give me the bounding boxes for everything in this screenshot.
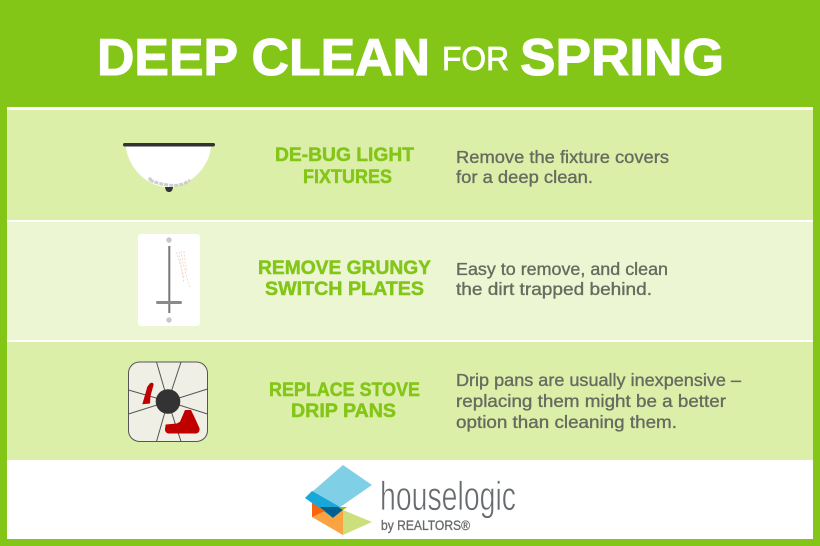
icon: light fixture	[123, 143, 215, 192]
text block	[456, 259, 668, 299]
text block: for a deep clean.	[456, 167, 593, 187]
text block: option than cleaning them.	[456, 412, 677, 432]
title: DEEP CLEAN	[97, 29, 430, 87]
heading: REMOVE GRUNGY	[258, 257, 431, 279]
heading: DRIP PANS	[291, 400, 396, 422]
title	[97, 29, 724, 87]
text block: Drip pans are usually inexpensive –	[456, 370, 741, 390]
panel: drip pans	[7, 340, 813, 460]
text block: the dirt trapped behind.	[456, 279, 652, 299]
heading: FIXTURES	[303, 166, 392, 188]
panel: switch plates	[7, 220, 813, 340]
logo wordmark: houselogic	[380, 473, 516, 519]
icon: stove drip pan	[128, 362, 208, 442]
text block: Remove the fixture covers	[456, 147, 669, 167]
title: FOR	[442, 40, 509, 77]
heading: DE-BUG LIGHT	[275, 144, 414, 166]
panel: light fixtures	[7, 107, 813, 220]
text block	[456, 370, 741, 432]
logo wordmark	[380, 473, 516, 533]
text block	[456, 147, 669, 187]
heading: SWITCH PLATES	[265, 278, 424, 300]
icon: switch plate	[138, 234, 200, 326]
icon: houselogic logo	[305, 465, 372, 535]
heading	[269, 379, 420, 422]
heading	[275, 144, 414, 188]
heading	[258, 257, 431, 300]
text block: Easy to remove, and clean	[456, 259, 668, 279]
heading: REPLACE STOVE	[269, 379, 420, 401]
footer panel	[7, 460, 813, 539]
logo wordmark: by REALTORS®	[381, 518, 470, 533]
text block: replacing them might be a better	[456, 391, 726, 411]
title: SPRING	[520, 29, 724, 87]
